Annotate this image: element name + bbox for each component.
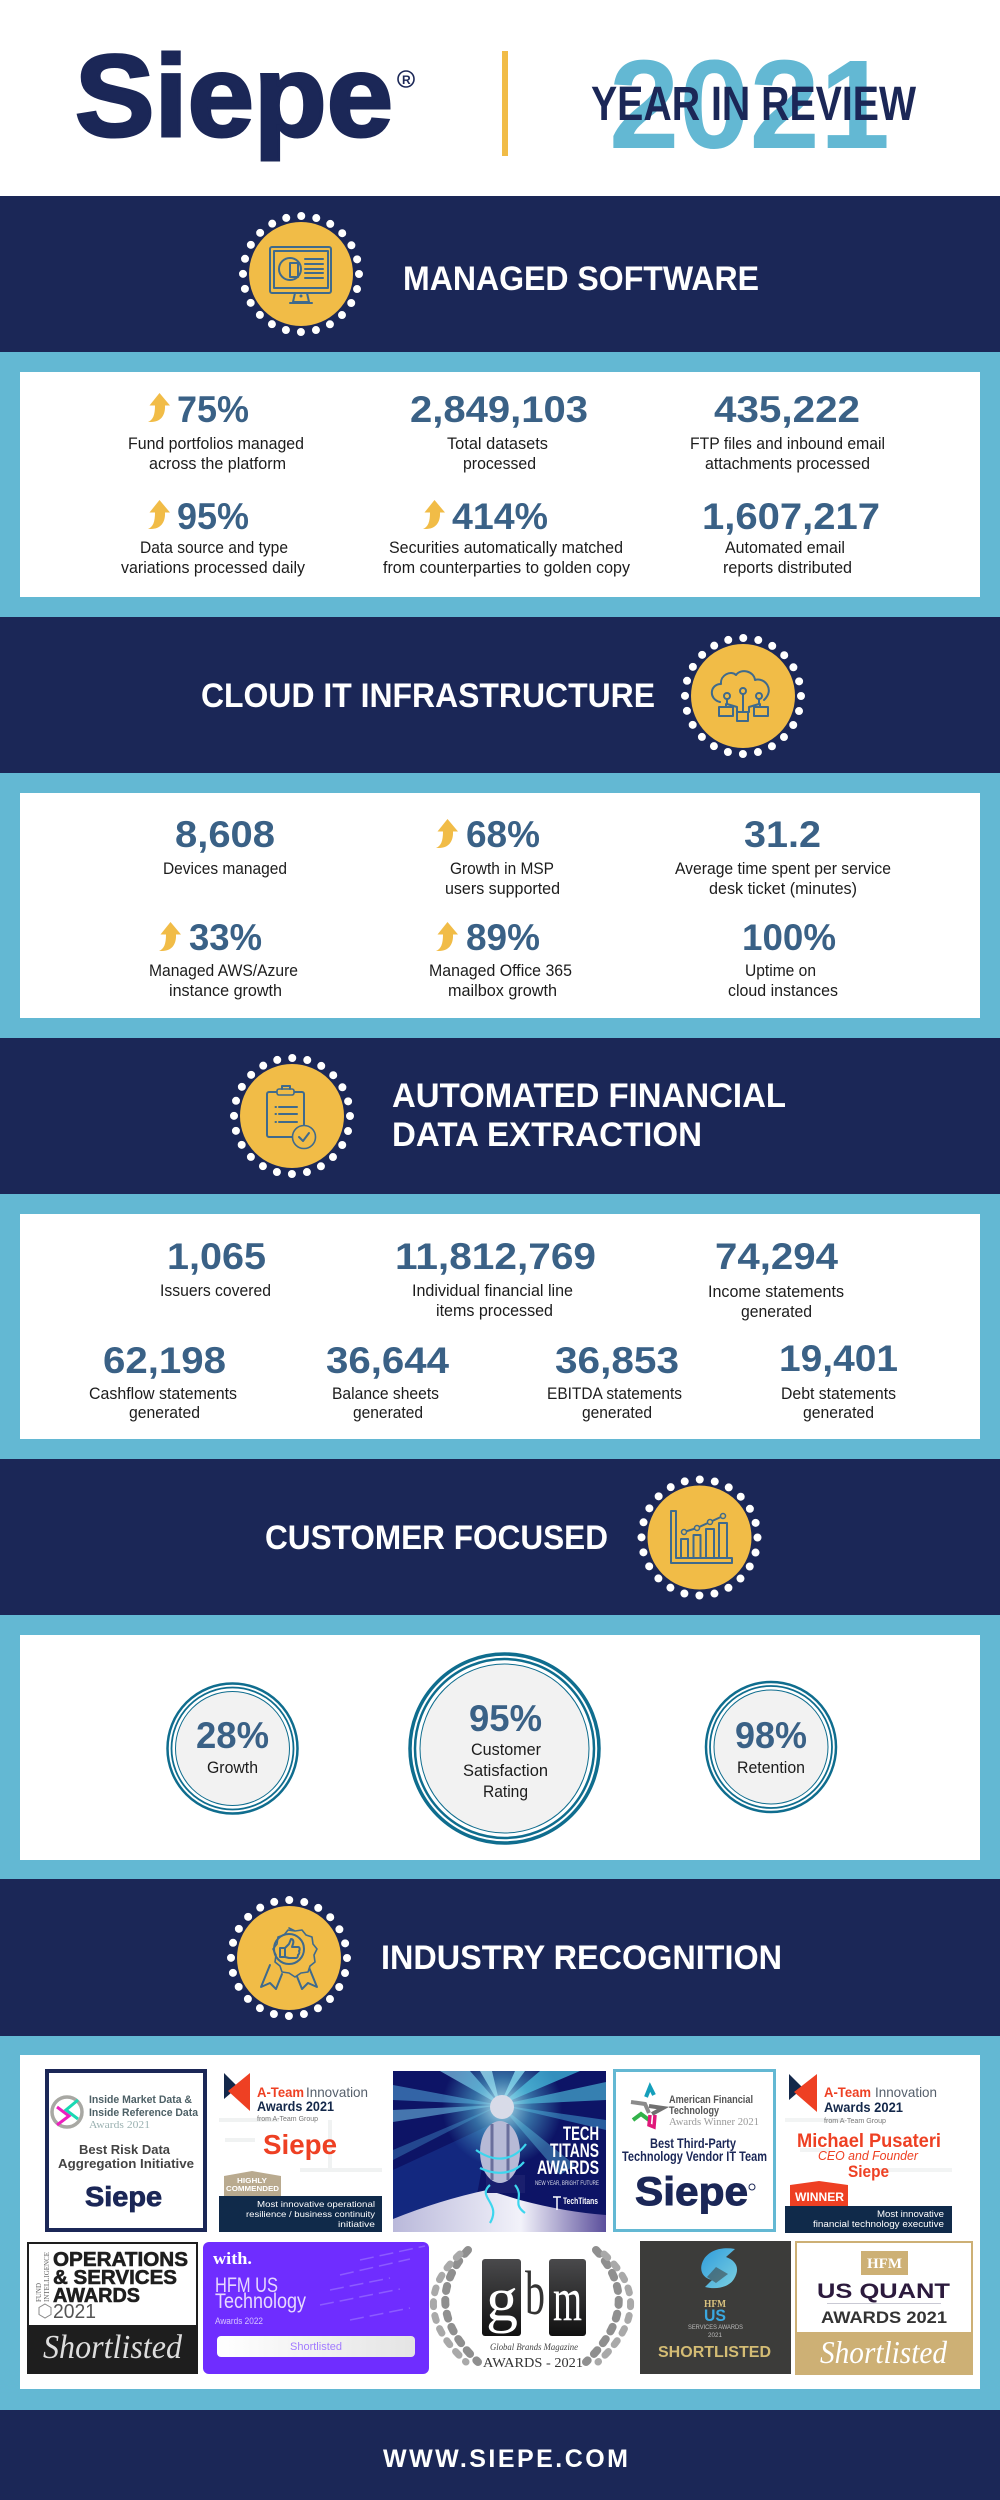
award: A-Team winner Michael Pusateri: Innovation	[875, 2084, 937, 2100]
icon: cloud network medallion	[685, 638, 801, 754]
panel: data extraction stats	[0, 1194, 1000, 1459]
title: 2021 Year in Review: YEAR IN REVIEW	[591, 78, 917, 131]
stat: 95% data source: 95%	[177, 496, 249, 537]
heading: automated financial data extraction: DATA EXTRACTION	[392, 1116, 702, 1154]
section: automated financial data extraction banner	[0, 1038, 1000, 1194]
stat: 33% AWS/Azure: Managed AWS/Azure	[149, 961, 298, 980]
award: HFM US Services	[640, 2241, 791, 2374]
title: 2021 Year in Review: 2021	[609, 34, 890, 175]
award: A-Team highly commended: Siepe	[263, 2129, 337, 2160]
award: Tech Titans: TechTitans	[563, 2196, 598, 2206]
circle stat: 28% growth: Growth	[207, 1758, 258, 1777]
award: HFM US Quant: HFM	[867, 2256, 902, 2272]
award: Inside Market Data: Inside Market Data &	[89, 2094, 192, 2106]
circle stat: 98% retention: Retention	[737, 1758, 805, 1777]
award: Tech Titans: TECH	[563, 2124, 599, 2145]
stat: automated email reports	[702, 496, 880, 577]
award: Operations & Services shortlisted: & SERVICES	[53, 2267, 177, 2289]
award: A-Team highly commended	[219, 2069, 382, 2232]
stat: 100% uptime: Uptime on	[745, 961, 816, 980]
stat: financial line items	[395, 1236, 596, 1320]
award: Global Brands Magazine: AWARDS - 2021	[483, 2356, 583, 2371]
stat: income statements: generated	[741, 1302, 812, 1321]
stat: FTP files: FTP files and inbound email	[690, 434, 885, 453]
stat: 100% uptime: cloud instances	[728, 981, 838, 1000]
heading: customer focused: CUSTOMER FOCUSED	[265, 1519, 608, 1557]
award: A-Team winner Michael Pusateri: Siepe	[848, 2162, 889, 2181]
stat: total datasets: Total datasets	[447, 434, 548, 453]
stat: issuers covered: Issuers covered	[160, 1281, 271, 1300]
award: American Financial Technology: Technology	[669, 2105, 720, 2117]
award: Global Brands Magazine: g	[486, 2266, 518, 2334]
stat: 75% fund portfolios: 75%	[177, 389, 249, 430]
stat: average ticket time: Average time spent per service	[675, 859, 891, 878]
stat: income statements	[708, 1236, 844, 1321]
stat: debt statements	[779, 1338, 898, 1422]
circle stat: 95% customer satisfaction	[410, 1654, 599, 1843]
award: HFM US Quant: AWARDS 2021	[821, 2308, 947, 2327]
award: A-Team winner Michael Pusateri	[785, 2069, 952, 2233]
award: HFM US Services: 2021	[708, 2333, 723, 2339]
stat: debt statements: Debt statements	[781, 1384, 896, 1403]
stat: 75% fund portfolios: across the platform	[149, 454, 286, 473]
icon: award ribbon medallion	[231, 1900, 347, 2016]
circle stat: 95% customer satisfaction: Satisfaction	[463, 1761, 548, 1780]
stat: total datasets	[410, 389, 588, 473]
award: Global Brands Magazine: Global Brands Magazine	[490, 2342, 578, 2352]
award: Tech Titans: TITANS	[550, 2141, 599, 2162]
stat: balance sheets: 36,644	[326, 1340, 449, 1381]
award: Operations & Services shortlisted: 2021	[53, 2301, 96, 2323]
stat: 89% Office 365	[429, 917, 572, 1000]
stat: balance sheets: generated	[353, 1403, 423, 1422]
award: Inside Market Data: Best Risk Data	[79, 2142, 171, 2157]
award: A-Team winner Michael Pusateri: A-Team	[824, 2084, 871, 2100]
circle stat: 95% customer satisfaction: Rating	[483, 1782, 528, 1801]
stat: 95% data source: variations processed daily	[121, 558, 305, 577]
stat: debt statements: generated	[803, 1403, 874, 1422]
panel: awards	[0, 2036, 1000, 2410]
award: A-Team winner Michael Pusateri: Michael Pusateri	[797, 2131, 941, 2152]
award: Operations & Services shortlisted	[27, 2242, 198, 2374]
award: A-Team highly commended: COMMENDED	[226, 2184, 280, 2193]
stat: balance sheets: Balance sheets	[332, 1384, 439, 1403]
stat: cashflow statements: Cashflow statements	[89, 1384, 237, 1403]
panel: customer focused stats	[0, 1615, 1000, 1879]
logo: Siepe: Siepe	[75, 31, 393, 161]
award: American Financial Technology	[614, 2070, 774, 2230]
stat: 68% MSP users	[436, 814, 560, 898]
circle stat: 95% customer satisfaction: Customer	[471, 1740, 541, 1759]
stat: 33% AWS/Azure: 33%	[189, 917, 262, 958]
award: Tech Titans: NEW YEAR, BRIGHT FUTURE	[535, 2180, 599, 2187]
award: HFM US Technology	[203, 2242, 429, 2374]
award: HFM US Technology: HFM US	[215, 2274, 278, 2297]
award: HFM US Technology: Shortlisted	[290, 2341, 342, 2353]
stat: 100% uptime	[728, 917, 838, 1000]
heading: cloud IT infrastructure: CLOUD IT INFRASTRUCTURE	[201, 677, 655, 715]
stat: 89% Office 365: Managed Office 365	[429, 961, 572, 980]
award: A-Team highly commended: from A-Team Group	[257, 2116, 318, 2123]
stat: 414% securities: Securities automatically matched	[389, 538, 623, 557]
award: A-Team winner Michael Pusateri: Awards 2021	[824, 2099, 903, 2115]
stat: FTP files: 435,222	[714, 389, 860, 430]
section: managed software banner	[0, 196, 1000, 352]
award: American Financial Technology: American Financial	[669, 2094, 753, 2106]
gold divider	[502, 51, 508, 156]
award: American Financial Technology: Best Third-Party	[650, 2135, 736, 2151]
award: Inside Market Data: Aggregation Initiative	[58, 2156, 194, 2171]
award: HFM US Technology: Awards 2022	[215, 2316, 263, 2326]
stat: EBITDA statements: generated	[582, 1403, 652, 1422]
stat: total datasets: 2,849,103	[410, 389, 588, 430]
stat: debt statements: 19,401	[779, 1338, 898, 1379]
award: Operations & Services shortlisted: Shortlisted	[43, 2329, 183, 2366]
award: HFM US Services: HFM	[704, 2299, 727, 2310]
stat: average ticket time: 31.2	[744, 814, 821, 855]
stat: 95% data source	[121, 496, 305, 577]
stat: financial line items: Individual financial line	[412, 1281, 573, 1300]
stat: FTP files	[690, 389, 885, 473]
stat: financial line items: 11,812,769	[395, 1236, 596, 1277]
stat: 95% data source: Data source and type	[140, 538, 288, 557]
stat: cashflow statements: generated	[129, 1403, 200, 1422]
award: American Financial Technology: Siepe	[635, 2170, 748, 2214]
heading: managed software: MANAGED SOFTWARE	[403, 260, 759, 298]
stat: cashflow statements: 62,198	[103, 1340, 226, 1381]
section: cloud IT banner	[0, 617, 1000, 773]
stat: 75% fund portfolios: Fund portfolios managed	[128, 434, 304, 453]
stat: automated email reports: Automated email	[725, 538, 845, 557]
header band	[0, 0, 1000, 196]
panel: managed software stats	[0, 352, 1000, 617]
stat: devices managed: Devices managed	[163, 859, 287, 878]
stat: FTP files: attachments processed	[705, 454, 870, 473]
award: Tech Titans: AWARDS	[537, 2158, 599, 2179]
stat: 75% fund portfolios	[128, 389, 304, 473]
award: A-Team highly commended: A-Team	[257, 2084, 304, 2100]
stat: 100% uptime: 100%	[742, 917, 836, 958]
stat: automated email reports: reports distributed	[723, 558, 852, 577]
award: Global Brands Magazine	[433, 2250, 631, 2371]
award: HFM US Quant	[795, 2242, 973, 2375]
stat: cashflow statements	[89, 1340, 237, 1422]
section: industry recognition banner	[0, 1879, 1000, 2036]
circle stat: 98% retention: 98%	[735, 1715, 807, 1756]
award: HFM US Quant: Shortlisted	[820, 2334, 948, 2370]
award: American Financial Technology: Awards Winner 2021	[669, 2116, 759, 2128]
award: Global Brands Magazine: m	[553, 2266, 582, 2334]
stat: income statements: 74,294	[715, 1236, 838, 1277]
footer	[0, 2410, 1000, 2500]
icon: monitor medallion	[243, 216, 359, 332]
heading: industry recognition: INDUSTRY RECOGNITION	[381, 1939, 782, 1977]
award: A-Team winner Michael Pusateri: Most innovative	[877, 2209, 944, 2219]
award: Tech Titans	[393, 2071, 606, 2232]
award: HFM US Technology: Technology	[215, 2290, 306, 2313]
stat: 89% Office 365: mailbox growth	[448, 981, 557, 1000]
circle stat: 28% growth: 28%	[196, 1715, 269, 1756]
stat: 414% securities: from counterparties to golden copy	[383, 558, 630, 577]
award: A-Team winner Michael Pusateri: financial technology executive	[813, 2219, 944, 2229]
stat: total datasets: processed	[463, 454, 536, 473]
award: HFM US Services: SHORTLISTED	[658, 2344, 771, 2361]
award: A-Team winner Michael Pusateri: CEO and Founder	[818, 2148, 919, 2163]
award: Operations & Services shortlisted: AWARDS	[53, 2285, 140, 2307]
stat: balance sheets	[326, 1340, 449, 1422]
award: HFM US Services: US	[704, 2306, 726, 2325]
stat: 89% Office 365: 89%	[466, 917, 540, 958]
icon: bar chart medallion	[642, 1480, 758, 1596]
stat: issuers covered: 1,065	[167, 1236, 266, 1277]
award: Inside Market Data: Siepe	[85, 2181, 162, 2212]
award: Global Brands Magazine: b	[525, 2260, 545, 2328]
stat: average ticket time: desk ticket (minutes)	[709, 879, 857, 898]
stat: EBITDA statements: EBITDA statements	[547, 1384, 682, 1403]
award: Operations & Services shortlisted: FUND	[35, 2283, 43, 2302]
stat: financial line items: items processed	[436, 1301, 553, 1320]
stat: 68% MSP users: users supported	[445, 879, 560, 898]
award: A-Team winner Michael Pusateri: WINNER	[795, 2190, 844, 2204]
stat: 414% securities: 414%	[452, 496, 548, 537]
icon: clipboard medallion	[234, 1058, 350, 1174]
award: American Financial Technology: Technology Vendor IT Team	[622, 2148, 767, 2164]
award: A-Team highly commended: Most innovative operational	[257, 2199, 375, 2209]
award: A-Team highly commended: Innovation	[306, 2084, 368, 2100]
stat: devices managed: 8,608	[175, 814, 275, 855]
heading: automated financial data extraction	[392, 1077, 786, 1154]
stat: income statements: Income statements	[708, 1282, 844, 1301]
stat: 68% MSP users: Growth in MSP	[450, 859, 554, 878]
circle stat: 95% customer satisfaction: 95%	[469, 1698, 542, 1739]
stat: average ticket time	[675, 814, 891, 898]
circle stat: 98% retention	[706, 1682, 836, 1812]
panel: cloud IT stats	[0, 773, 1000, 1038]
award: A-Team winner Michael Pusateri: from A-Team Group	[824, 2118, 886, 2125]
circle stat: 28% growth	[168, 1684, 298, 1814]
award: Operations & Services shortlisted: INTELLIGENCE	[43, 2252, 51, 2302]
award: A-Team highly commended: Awards 2021	[257, 2098, 334, 2114]
section: customer focused banner	[0, 1459, 1000, 1615]
award: HFM US Services: SERVICES AWARDS	[688, 2325, 743, 2331]
stat: devices managed	[163, 814, 287, 878]
award: HFM US Quant: US QUANT	[817, 2280, 950, 2303]
stat: 68% MSP users: 68%	[466, 814, 540, 855]
logo: Siepe: R	[402, 73, 411, 87]
stat: 414% securities	[383, 496, 630, 577]
award: Operations & Services shortlisted: OPERATIONS	[53, 2249, 188, 2271]
stat: EBITDA statements	[547, 1340, 682, 1422]
stat: 33% AWS/Azure: instance growth	[169, 981, 282, 1000]
award: A-Team highly commended: HIGHLY	[237, 2176, 267, 2185]
stat: EBITDA statements: 36,853	[555, 1340, 679, 1381]
award: HFM US Technology: with.	[213, 2249, 252, 2268]
award: A-Team highly commended: initiative	[338, 2219, 375, 2229]
stat: automated email reports: 1,607,217	[702, 496, 880, 537]
award: Inside Market Data	[47, 2071, 205, 2230]
award: Inside Market Data: Awards 2021	[89, 2119, 150, 2131]
award: Inside Market Data: Inside Reference Data	[89, 2107, 199, 2119]
website url: WWW.SIEPE.COM	[383, 2445, 628, 2473]
stat: 33% AWS/Azure	[149, 917, 298, 1000]
stat: issuers covered	[160, 1236, 271, 1300]
heading: automated financial data extraction: AUTOMATED FINANCIAL	[392, 1077, 786, 1115]
award: A-Team highly commended: resilience / business continuity	[246, 2209, 376, 2219]
